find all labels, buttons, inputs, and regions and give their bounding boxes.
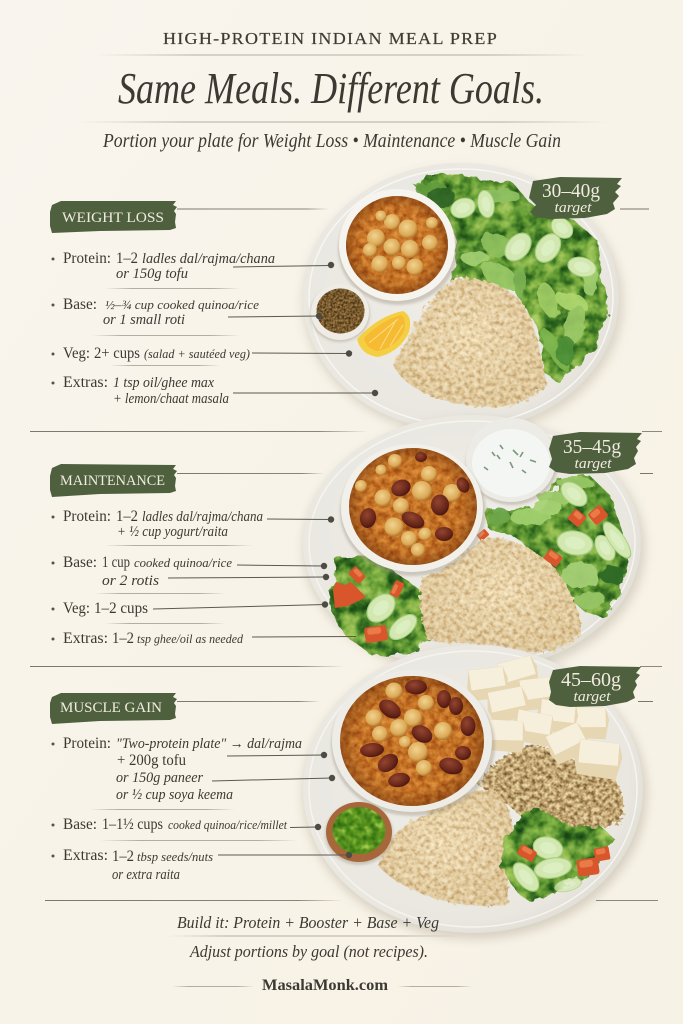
leader line: protein — [233, 262, 334, 268]
leader line: base — [228, 313, 322, 319]
target badge: 45-60g: 45–60g — [561, 669, 621, 691]
website credit: MasalaMonk.com — [262, 977, 389, 994]
leader line: protein — [267, 516, 334, 523]
footer — [168, 913, 472, 994]
row: protein: Protein: — [63, 250, 111, 267]
subtitle: Portion your plate for Weight Loss • Maintenance • Muscle Gain — [102, 130, 561, 152]
row: extras: 1 tsp oil/ghee max — [113, 375, 214, 391]
row: protein: Protein: — [63, 735, 111, 752]
carrots — [333, 566, 405, 643]
row: extras: 1–2 — [112, 630, 134, 647]
panel: weight loss — [50, 201, 378, 407]
leader line: extras — [233, 390, 378, 396]
row: base: cooked quinoa/rice — [134, 555, 232, 570]
row: base: Base: — [63, 296, 97, 313]
lemon wedge — [357, 311, 410, 357]
curry bowl: chickpea and rajma — [340, 444, 486, 576]
row: veg — [52, 600, 148, 617]
row: veg: 1–2 cups — [94, 600, 148, 617]
row: extras: 1–2 — [112, 848, 134, 865]
row: base: or 2 rotis — [102, 573, 159, 589]
plate: muscle gain — [303, 645, 647, 939]
row: protein: or ½ cup soya keema — [116, 787, 233, 803]
salad — [412, 173, 608, 383]
chutney bowl — [325, 802, 393, 865]
row: veg — [52, 345, 250, 362]
cucumbers — [361, 588, 422, 645]
leader line: extras — [252, 636, 356, 638]
side rules — [596, 208, 662, 901]
row: extras: or extra raita — [112, 867, 180, 883]
row: protein: ladles dal/rajma/chana — [142, 251, 275, 267]
cucumbers — [447, 188, 599, 281]
leader line: base — [290, 824, 321, 830]
quinoa — [420, 538, 581, 652]
quinoa — [393, 278, 547, 407]
row: extras — [52, 847, 213, 883]
row: base — [52, 554, 232, 589]
leader line: rotis — [168, 574, 329, 580]
leader line: base — [237, 563, 327, 569]
row: protein: or 150g paneer — [116, 770, 203, 786]
leader line: veg — [153, 601, 328, 609]
row: protein: + ½ cup yogurt/raita — [117, 524, 228, 540]
row: protein — [52, 508, 263, 540]
row: protein: 1–2 — [116, 508, 138, 525]
target badge: 30-40g: target — [554, 200, 592, 216]
salad right — [477, 476, 636, 618]
row: base — [52, 296, 259, 328]
quinoa — [378, 790, 513, 906]
title block — [78, 29, 608, 152]
row: extras: tbsp seeds/nuts — [137, 849, 213, 864]
raita bowl — [466, 418, 558, 505]
row: protein: "Two-protein plate" → dal/rajma — [116, 736, 302, 752]
row: veg: (salad + sautéed veg) — [144, 346, 250, 361]
target badge: 30-40g: 30–40g — [542, 180, 600, 202]
leader line: tofu — [227, 752, 327, 758]
eyebrow heading: HIGH-PROTEIN INDIAN MEAL PREP — [163, 29, 498, 48]
salad — [502, 810, 614, 902]
panel: maintenance — [50, 464, 356, 647]
heading badge: maintenance: MAINTENANCE — [60, 473, 165, 489]
carrots — [477, 504, 609, 568]
row: base: ½–¾ cup cooked quinoa/rice — [105, 297, 259, 312]
lentil and quinoa mix — [478, 746, 623, 832]
row: protein: 1–2 — [116, 250, 138, 267]
spice bowl — [310, 284, 370, 342]
row: base: cooked quinoa/rice/millet — [168, 817, 287, 832]
row: veg: 2+ cups — [94, 345, 140, 362]
carrots — [517, 844, 611, 877]
salad left — [330, 554, 438, 658]
target badge: 30-40g — [529, 177, 622, 219]
row: protein — [52, 735, 302, 803]
row: base: 1 cup — [102, 554, 130, 571]
heading badge: muscle gain: MUSCLE GAIN — [60, 700, 162, 716]
leader line: extras — [218, 852, 352, 858]
target badge: 45-60g — [549, 666, 641, 707]
row: extras — [52, 630, 243, 647]
row: protein: or 150g tofu — [116, 266, 188, 282]
row: extras: + lemon/chaat masala — [113, 391, 229, 407]
row: base: Base: — [63, 816, 97, 833]
main title: Same Meals. Different Goals. — [118, 64, 544, 113]
row: veg: Veg: — [63, 600, 90, 617]
target badge: 35-45g — [549, 432, 642, 474]
row: extras: Extras: — [63, 374, 108, 391]
adjust portions line: Adjust portions by goal (not recipes). — [189, 942, 428, 961]
row: base: Base: — [63, 554, 97, 571]
tofu cubes — [468, 655, 624, 783]
cucumbers — [507, 833, 583, 897]
row: base: 1–1½ cups — [102, 816, 163, 833]
heading badge: weight loss: WEIGHT LOSS — [62, 210, 164, 226]
panel: muscle gain — [50, 693, 352, 883]
leader line: paneer — [212, 775, 335, 781]
row: extras: Extras: — [63, 847, 108, 864]
plate: maintenance — [303, 415, 645, 677]
curry bowl: chickpea — [338, 189, 458, 305]
row: protein: + 200g tofu — [117, 752, 186, 769]
row: veg: Veg: — [63, 345, 90, 362]
row: extras — [52, 374, 229, 407]
target badge: 35-45g: target — [574, 456, 612, 472]
row: protein: ladles dal/rajma/chana — [142, 509, 263, 525]
curry bowl: rajma and chickpea — [331, 670, 495, 816]
target badge: 45-60g: target — [574, 689, 611, 705]
build it line: Build it: Protein + Booster + Base + Veg — [177, 913, 439, 932]
row: protein: Protein: — [63, 508, 111, 525]
row: extras: Extras: — [63, 630, 108, 647]
plate: weight loss — [303, 163, 623, 436]
row: protein — [52, 250, 275, 282]
target badge: 35-45g: 35–45g — [563, 436, 621, 458]
row: base: or 1 small roti — [103, 312, 185, 328]
heading badge: weight loss — [50, 201, 177, 233]
row: extras: tsp ghee/oil as needed — [137, 631, 243, 646]
leader line: veg — [252, 350, 352, 357]
cucumbers — [554, 476, 636, 565]
row: base — [52, 816, 287, 833]
heading badge: muscle gain — [50, 693, 177, 724]
heading badge: maintenance — [50, 464, 177, 497]
